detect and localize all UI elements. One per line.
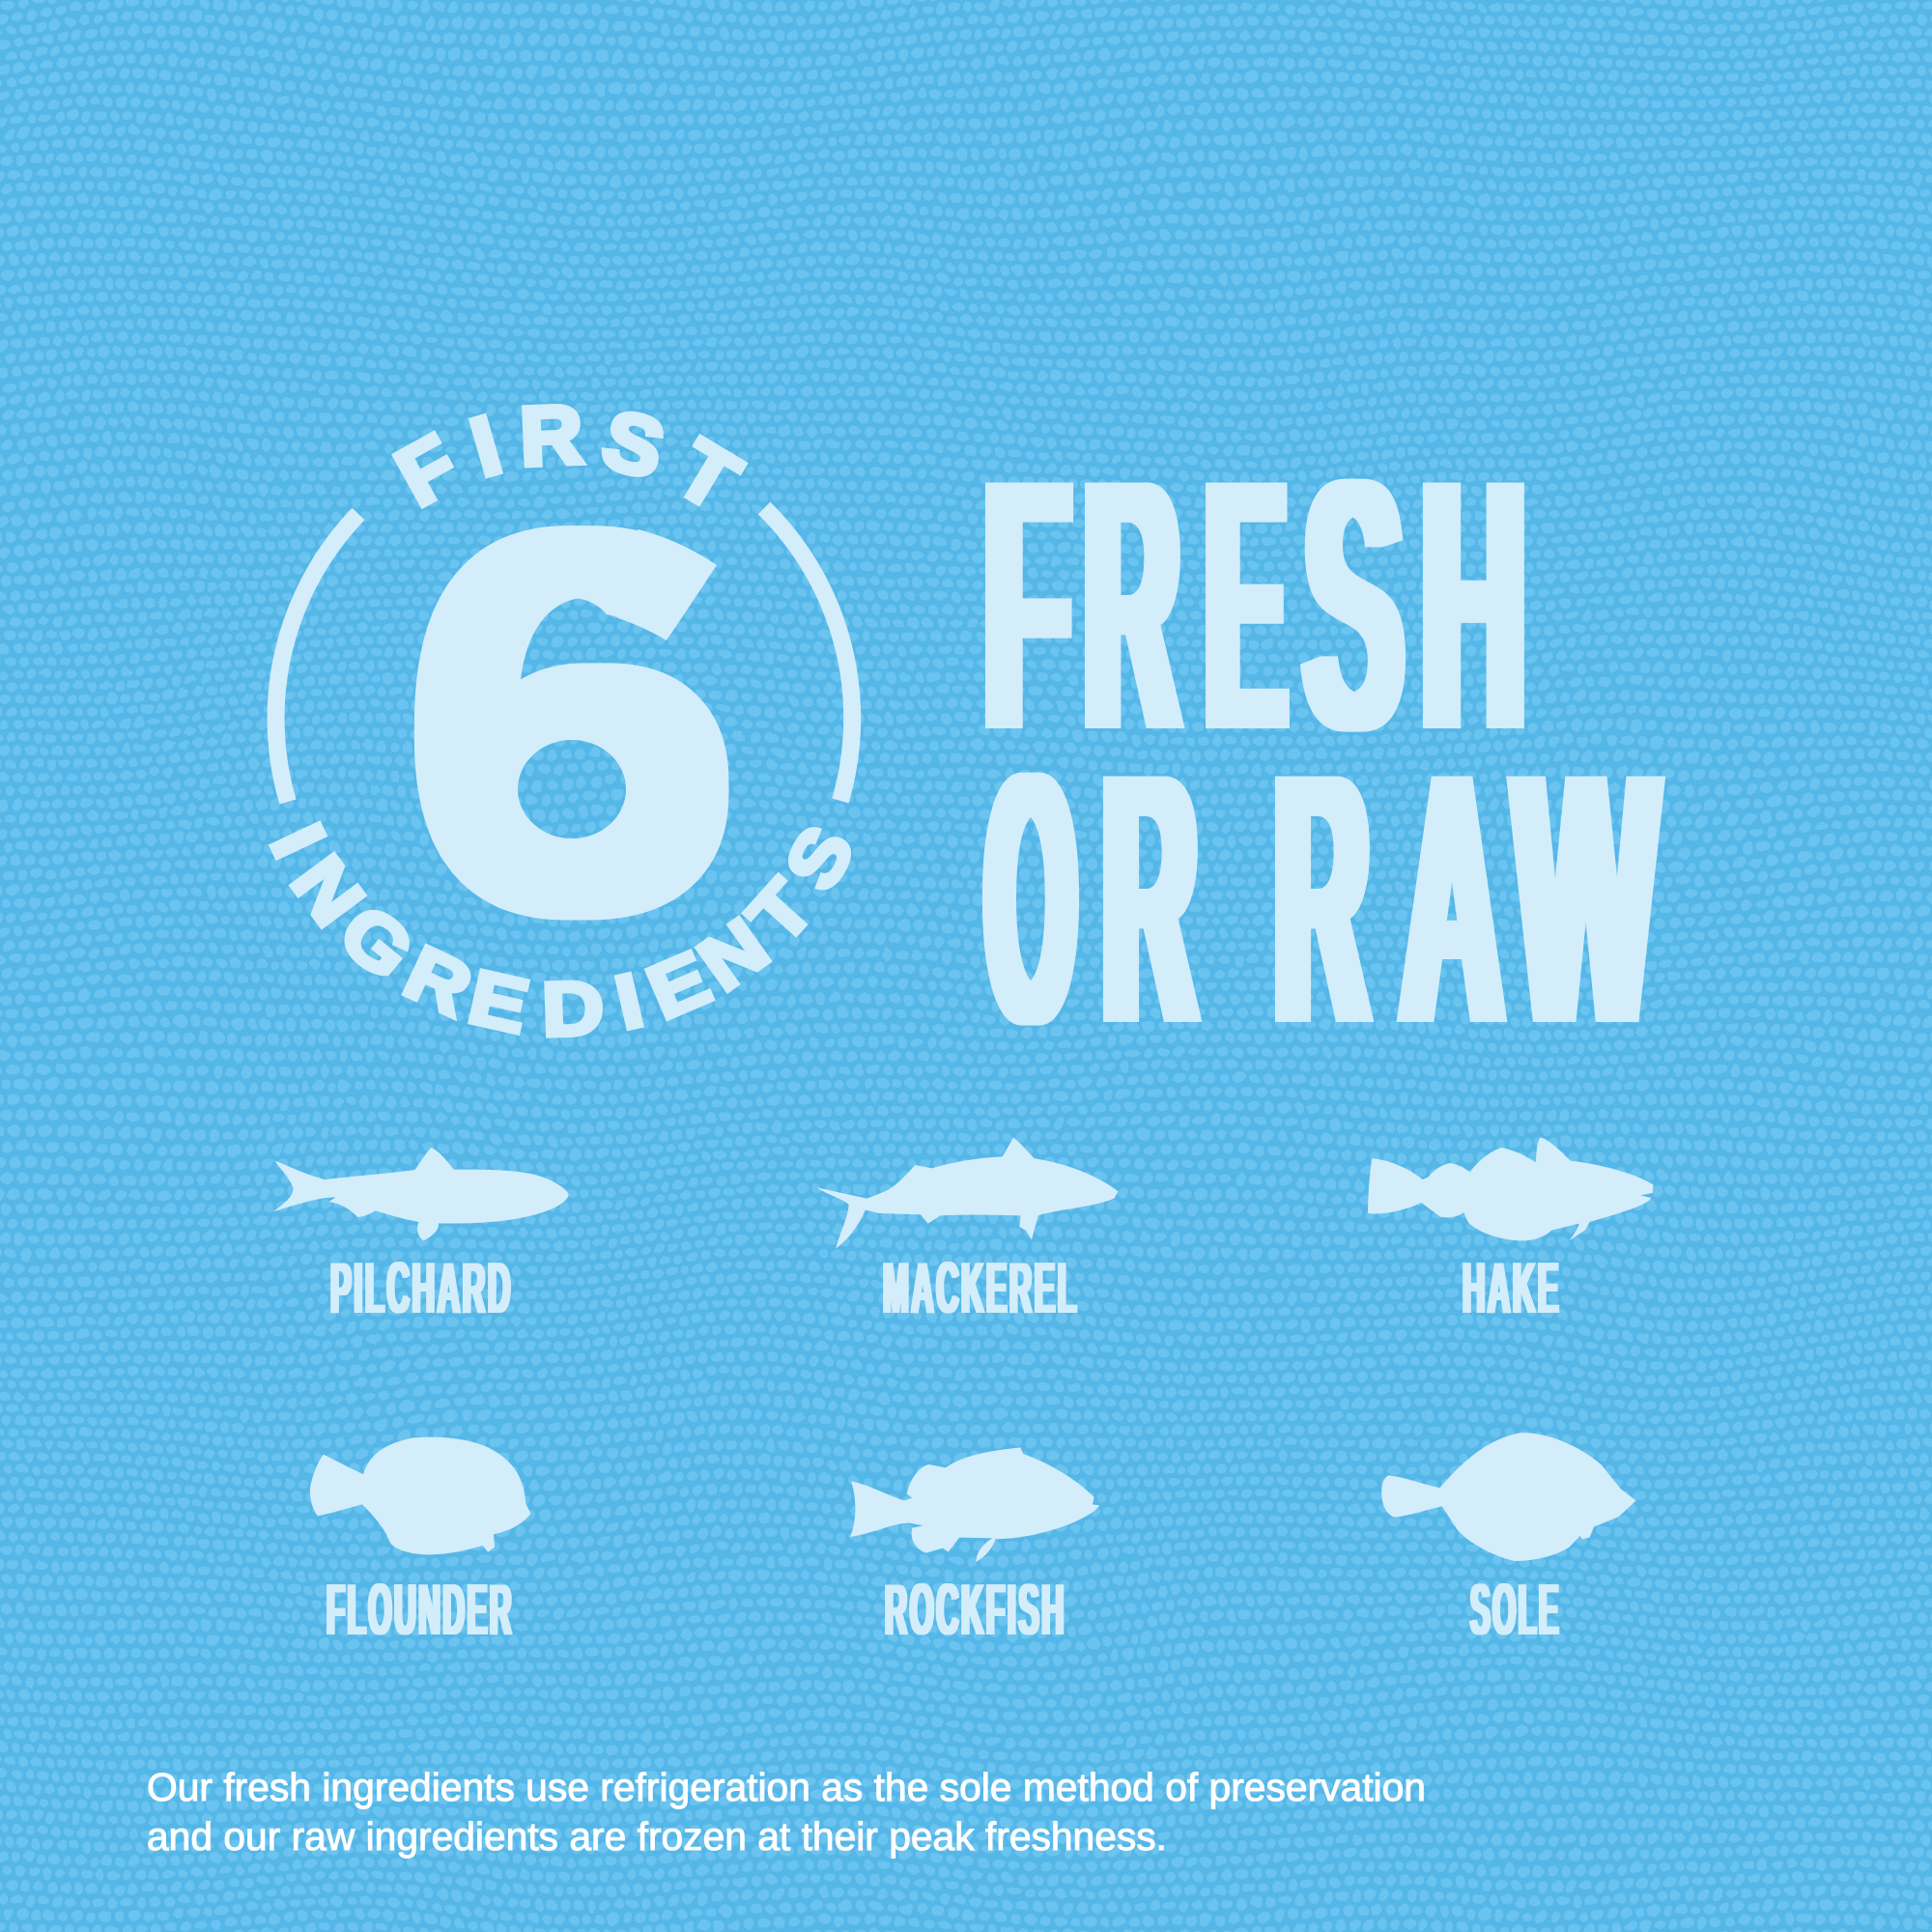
curved word: INGREDIENTS: T [731,864,830,960]
curved word: INGREDIENTS: E [636,934,722,1036]
curved word: INGREDIENTS: N [683,901,783,1007]
fish name labels: ROCKFISH [885,1569,1066,1650]
curved word: FIRST: T [661,422,754,528]
text: HAKE [1463,1247,1561,1328]
big numeral 6: 6 [404,422,739,1023]
icon: pilchard [273,1148,569,1240]
badge ring: left arc [276,514,358,802]
heading line: OR RAW: R [1103,698,1196,1098]
footnote line one: Our fresh ingredients use refrigeration as the sole method of preservation [147,1765,1426,1809]
heading line: FRESH: F [984,405,1069,805]
heading line: OR RAW: A [1402,698,1502,1098]
fish icons: row one [273,1137,1118,1248]
icon: flounder [310,1437,530,1554]
curved word: FIRST: R [519,388,584,483]
heading line: OR RAW: R [1275,698,1368,1098]
heading: FRESH OR RAW [984,405,1659,1098]
fish name labels: PILCHARD [330,1247,513,1328]
footnote line two: and our raw ingredients are frozen at their peak freshness. [147,1814,1167,1859]
curved word: INGREDIENTS [254,811,870,1052]
curved word: INGREDIENTS: R [392,929,485,1033]
footnote text [147,1765,1426,1859]
fish name labels: MACKEREL [883,1247,1079,1328]
badge: first 6 ingredients [254,388,870,1052]
curved word: FIRST [382,388,754,528]
icon: rockfish [850,1447,1099,1562]
icon: hake [1368,1137,1654,1240]
curved word: INGREDIENTS: G [324,888,430,996]
heading line: FRESH: H [1422,405,1525,805]
heading line: OR RAW [986,698,1659,1098]
heading line: FRESH [984,405,1525,806]
fish name labels: FLOUNDER [327,1569,514,1650]
text: SOLE [1470,1569,1561,1650]
curved word: INGREDIENTS: N [275,840,381,941]
fish name labels [327,1247,1561,1650]
icon: mackerel [817,1137,1118,1248]
curved word: INGREDIENTS: E [462,953,536,1049]
curved word: FIRST: S [594,392,673,497]
curved word: INGREDIENTS: S [768,812,870,903]
curved word: FIRST: F [382,417,472,524]
heading line: FRESH: R [1085,406,1179,806]
heading line: FRESH: S [1304,405,1403,804]
heading line: OR RAW: O [986,699,1075,1098]
curved word: FIRST: I [462,398,510,494]
curved word: INGREDIENTS: I [254,811,342,869]
big numeral 6 [413,526,728,920]
badge ring: right arc [764,508,852,801]
curved word: INGREDIENTS: I [608,957,650,1045]
icon: sole [1381,1433,1636,1561]
fish icons: row two [310,1437,1099,1562]
heading line: OR RAW: W [1515,699,1659,1098]
curved word: INGREDIENTS: D [541,965,605,1052]
heading line: FRESH: E [1207,406,1286,805]
